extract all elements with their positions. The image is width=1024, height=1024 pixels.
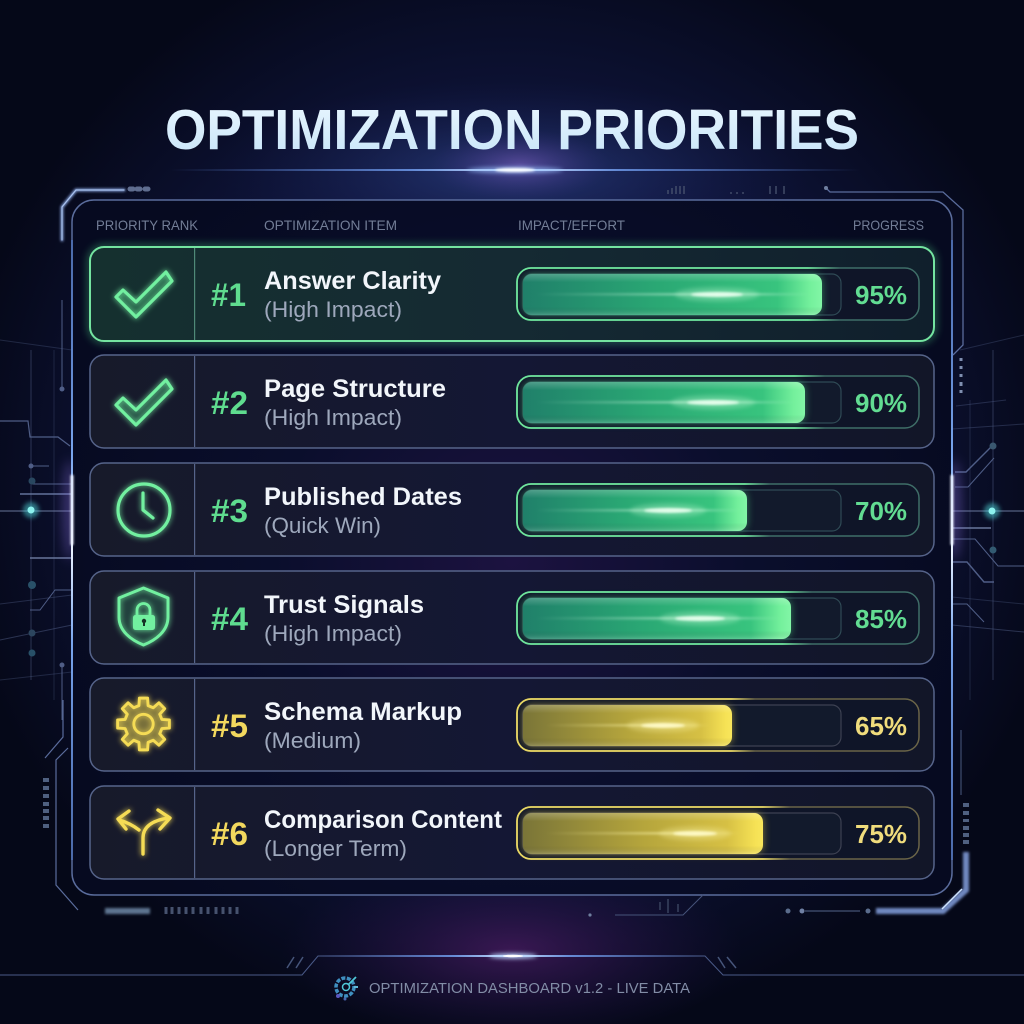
- row 3: Published Dates: [90, 463, 934, 556]
- icon: shield with lock: [119, 588, 168, 645]
- frame corner: top left: [62, 189, 148, 240]
- teal node right: [984, 503, 1000, 519]
- title glow line: [170, 167, 860, 173]
- item impact: (Quick Win): [264, 513, 381, 538]
- item name: Page Structure: [264, 375, 446, 403]
- item name: Published Dates: [264, 483, 462, 511]
- item name: Comparison Content: [264, 806, 503, 834]
- item name: Answer Clarity: [264, 267, 441, 295]
- icon: split arrows: [118, 810, 170, 854]
- icon: check: [116, 272, 172, 317]
- rank #2: #2: [211, 385, 248, 421]
- table header: [96, 217, 924, 233]
- rank #4: #4: [211, 601, 248, 637]
- frame corner: bottom right: [588, 730, 966, 917]
- header: progress: PROGRESS: [853, 217, 924, 233]
- frame corner: top right: [668, 186, 963, 393]
- frame corner: bottom left: [45, 700, 237, 914]
- progress bar 65%: [517, 699, 919, 751]
- footer logo icon: [336, 977, 358, 1000]
- footer frame line: [0, 954, 1024, 975]
- progress bar 90%: [517, 376, 919, 428]
- rank #6: #6: [211, 816, 248, 852]
- item name: Trust Signals: [264, 591, 424, 619]
- percent 65: 65%: [855, 711, 907, 741]
- percent 70: 70%: [855, 496, 907, 526]
- rank #1: #1: [211, 277, 246, 313]
- main panel: [63, 200, 961, 895]
- item name: Schema Markup: [264, 698, 462, 726]
- percent 90: 90%: [855, 388, 907, 418]
- progress bar 85%: [517, 592, 919, 644]
- circuit decoration: left: [0, 300, 72, 720]
- percent 75: 75%: [855, 819, 907, 849]
- icon: check: [116, 380, 172, 425]
- item impact: (High Impact): [264, 621, 402, 646]
- row 6: Comparison Content: [90, 786, 934, 879]
- progress bar 70%: [517, 484, 919, 536]
- item impact: (Medium): [264, 728, 361, 753]
- circuit decoration: right: [952, 335, 1024, 700]
- percent 85: 85%: [855, 604, 907, 634]
- icon: clock: [118, 484, 170, 536]
- row 4: Trust Signals: [90, 571, 934, 664]
- item impact: (High Impact): [264, 405, 402, 430]
- rank #3: #3: [211, 493, 248, 529]
- item impact: (Longer Term): [264, 836, 407, 861]
- row 2: Page Structure: [90, 355, 934, 448]
- progress bar 75%: [517, 807, 919, 859]
- header: impact/effort: IMPACT/EFFORT: [518, 217, 625, 233]
- rank #5: #5: [211, 708, 248, 744]
- row 1: Answer Clarity: [90, 247, 934, 341]
- row 5: Schema Markup: [90, 678, 934, 771]
- item impact: (High Impact): [264, 297, 402, 322]
- header: optimization item: OPTIMIZATION ITEM: [264, 217, 397, 233]
- icon: gear: [118, 698, 169, 750]
- title: OPTIMIZATION PRIORITIES: [165, 98, 859, 162]
- teal node left: [23, 502, 39, 518]
- footer text: OPTIMIZATION DASHBOARD v1.2 - LIVE DATA: [369, 980, 690, 997]
- percent 95: 95%: [855, 280, 907, 310]
- progress bar 95%: [517, 268, 919, 320]
- header: priority rank: PRIORITY RANK: [96, 217, 199, 233]
